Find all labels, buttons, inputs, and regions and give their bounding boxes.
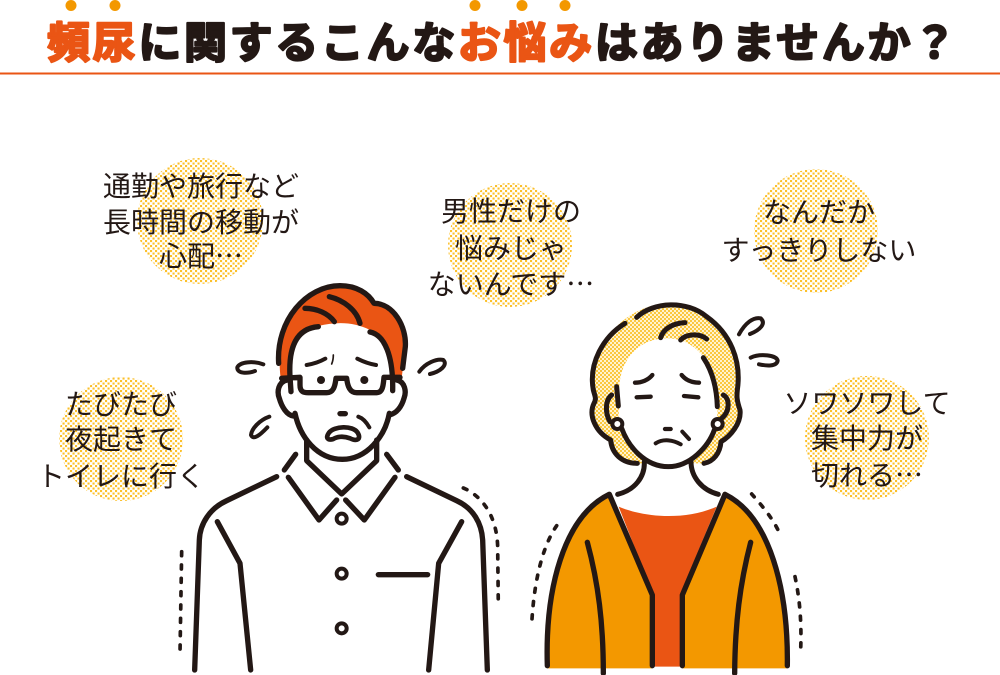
woman head lines (592, 305, 740, 494)
bubble: commute worry: 心配… (159, 235, 243, 275)
bubble: losing focus (783, 376, 951, 500)
woman earrings (612, 419, 723, 429)
bubble: night toilet (37, 377, 205, 501)
man hair (280, 286, 405, 378)
bubble: losing focus: ソワソワして (783, 388, 951, 419)
woman shirt (619, 507, 717, 667)
bubble: not refreshed: すっきりしない (722, 235, 916, 266)
woman neck (618, 462, 718, 494)
woman motion dashes (532, 494, 801, 650)
woman sweat marks (739, 318, 778, 365)
emphasis dots (66, 0, 570, 11)
illustration: worried man (180, 286, 498, 670)
bubble: night toilet: たびたび (65, 389, 177, 420)
bubble: losing focus: 切れる… (811, 454, 923, 494)
bubble: not only men: ないんです… (428, 263, 594, 303)
bubble: night toilet: トイレに行く (37, 461, 205, 492)
bubble: not refreshed: なんだか (763, 197, 875, 228)
bubble: not only men: 男性だけの (441, 196, 581, 227)
woman cardigan lines (547, 494, 787, 673)
man motion dashes (180, 488, 498, 653)
title (47, 0, 959, 68)
man head lines (278, 286, 405, 459)
woman hair (592, 303, 741, 463)
bubble: commute worry: 通勤や旅行など (103, 171, 299, 202)
woman cardigan (547, 494, 787, 668)
man sweat marks (237, 360, 445, 437)
bubble: night toilet: 夜起きて (65, 424, 177, 455)
illustration: worried woman (532, 303, 801, 673)
heading text: 頻尿に関するこんなお悩みはありませんか？ (47, 20, 959, 68)
title rule (0, 72, 1000, 74)
bubble: losing focus: 集中力が (811, 423, 923, 454)
man shirt lines (195, 440, 487, 670)
bubble: commute worry: 長時間の移動が (103, 207, 299, 238)
woman face (618, 338, 718, 467)
man eyes (317, 376, 368, 384)
man buttons (337, 514, 347, 633)
bubble: commute worry (103, 158, 299, 284)
bubble: not only men (428, 183, 594, 307)
bubble: not refreshed (722, 169, 916, 293)
bubble: not only men: 悩みじゃ (455, 233, 567, 264)
